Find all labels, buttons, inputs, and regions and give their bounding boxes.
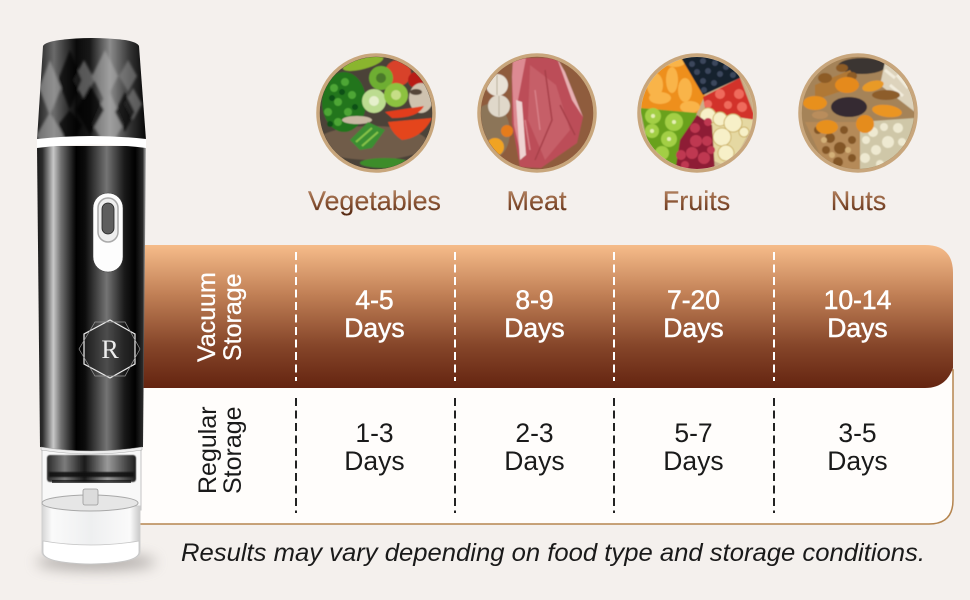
label: vegetables: Vegetables [308, 186, 441, 216]
panel: storage comparison table [130, 245, 953, 524]
collection base [42, 506, 140, 564]
product: vacuum sealer device [36, 36, 156, 570]
regular storage values: Days [827, 446, 888, 476]
logo emblem [79, 320, 140, 378]
vacuum storage row background [130, 245, 953, 388]
base ring [43, 541, 139, 564]
food: nuts [799, 55, 917, 171]
vacuum storage values: 8-9 [515, 285, 554, 315]
label: nuts: Nuts [831, 186, 886, 216]
device main body [37, 146, 146, 452]
white dashed column dividers [296, 252, 774, 381]
regular storage values: Days [504, 446, 565, 476]
dark dashed column dividers [296, 398, 774, 513]
row label: regular storage: Storage [219, 406, 247, 494]
vacuum storage values: 7-20 [667, 285, 720, 315]
vacuum storage values: Days [663, 313, 724, 343]
vacuum storage values: Days [344, 313, 405, 343]
logo emblem: R [101, 335, 119, 364]
silver lip [41, 447, 142, 454]
vacuum storage values: Days [827, 313, 888, 343]
base pin [83, 489, 98, 505]
regular storage values: Days [344, 446, 405, 476]
regular storage values [344, 418, 888, 476]
vacuum storage values: 10-14 [824, 285, 891, 315]
disclaimer text: Results may vary depending on food type and storage conditions. [181, 539, 925, 567]
power button [93, 193, 123, 272]
vacuum storage values [344, 285, 891, 343]
label: meat: Meat [506, 186, 567, 216]
row label: vacuum storage: Vacuum [193, 272, 221, 362]
row label: regular storage: Regular [194, 406, 222, 494]
regular storage values: 2-3 [515, 418, 554, 448]
clear chamber [42, 447, 141, 510]
row label: vacuum storage: Storage [219, 273, 247, 361]
inner gear section [47, 455, 136, 483]
vacuum storage values: 4-5 [355, 285, 394, 315]
row label: vacuum storage [193, 272, 247, 362]
device shadow [36, 554, 156, 570]
diamond textured cap [37, 38, 146, 139]
regular storage values: Days [663, 446, 724, 476]
regular storage values: 5-7 [674, 418, 713, 448]
vacuum storage values: Days [504, 313, 565, 343]
white ring [37, 136, 146, 148]
regular storage values: 1-3 [355, 418, 394, 448]
regular storage values: 3-5 [838, 418, 877, 448]
food labels [308, 186, 886, 216]
row label: regular storage [194, 406, 247, 494]
base lid disc [42, 495, 138, 511]
food: fruits [638, 55, 756, 172]
regular storage row background [130, 370, 953, 524]
food: meat [470, 55, 596, 171]
label: fruits: Fruits [663, 186, 730, 216]
food: vegetables [316, 52, 434, 171]
